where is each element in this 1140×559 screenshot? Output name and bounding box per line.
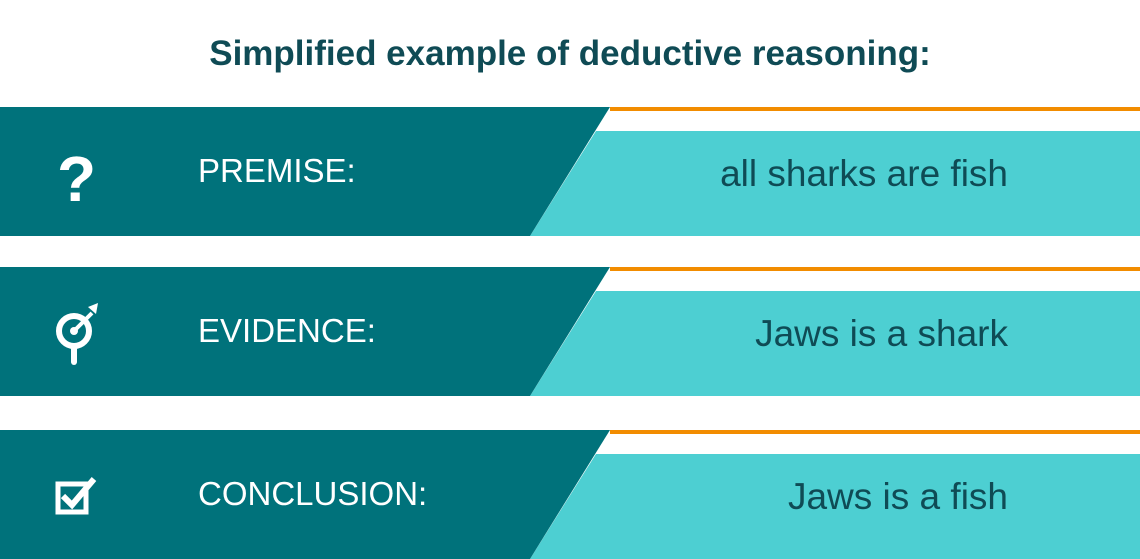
label: conclusion: CONCLUSION:: [198, 475, 427, 512]
label: evidence: EVIDENCE:: [198, 312, 376, 349]
panel: evidence: [0, 267, 1140, 396]
label: premise: PREMISE:: [198, 152, 356, 189]
icon: target: [56, 303, 98, 365]
text: evidence value: Jaws is a shark: [755, 313, 1008, 354]
text: conclusion value: Jaws is a fish: [788, 476, 1008, 517]
panel: premise: [0, 107, 1140, 236]
icon: checkbox: [56, 477, 96, 514]
panel: conclusion: [0, 430, 1140, 559]
title: Simplified example of deductive reasoning:: [209, 34, 931, 73]
text: premise value: all sharks are fish: [720, 153, 1008, 194]
